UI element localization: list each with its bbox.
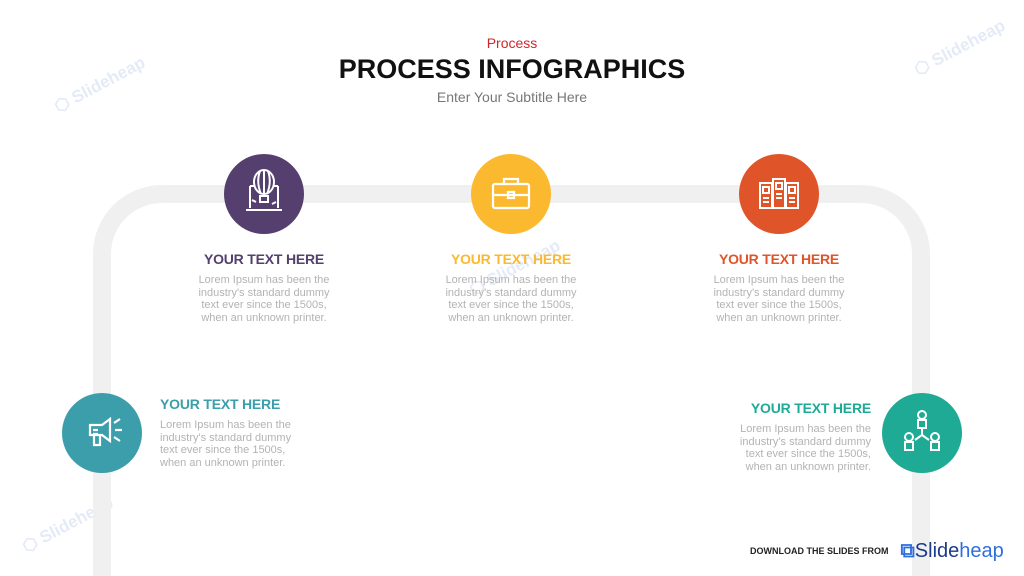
text block 5: when an unknown printer.	[746, 461, 871, 473]
footer logo: heap	[959, 540, 1004, 562]
text block 2: industry's standard dummy	[445, 287, 577, 299]
text block 3: when an unknown printer.	[716, 312, 842, 324]
text block 4: when an unknown printer.	[160, 457, 285, 469]
icon: purple balloon	[224, 154, 304, 234]
watermarks: ⬡ Slideheap	[19, 493, 116, 556]
footer logo: Slide	[915, 540, 959, 562]
text block 1: YOUR TEXT HERE	[204, 251, 324, 267]
text block 1: industry's standard dummy	[198, 287, 330, 299]
watermarks: ⬡ Slideheap	[911, 16, 1008, 79]
text block 2: Lorem Ipsum has been the	[446, 274, 576, 286]
watermarks: ⬡ Slideheap	[51, 53, 148, 116]
title block: Process	[487, 35, 537, 51]
footer logo	[750, 540, 1004, 562]
text block 5: Lorem Ipsum has been the	[740, 423, 871, 435]
text block 5: text ever since the 1500s,	[746, 448, 871, 460]
title block	[339, 35, 685, 105]
text block 4: industry's standard dummy	[160, 432, 291, 444]
text block 1: text ever since the 1500s,	[201, 299, 327, 311]
text block 1: when an unknown printer.	[201, 312, 327, 324]
title block: Enter Your Subtitle Here	[437, 89, 587, 105]
watermarks: ⬡ Slideheap	[466, 236, 563, 299]
text block 5	[740, 400, 871, 473]
text block 3: text ever since the 1500s,	[716, 299, 842, 311]
footer logo: DOWNLOAD THE SLIDES FROM	[750, 546, 888, 556]
text block 3	[713, 251, 845, 324]
text block 1: Lorem Ipsum has been the	[199, 274, 329, 286]
icon: orange buildings	[739, 154, 819, 234]
text block 1	[198, 251, 330, 324]
icon: green network	[882, 393, 962, 473]
text block 3: industry's standard dummy	[713, 287, 845, 299]
text block 4: YOUR TEXT HERE	[160, 396, 280, 412]
text block 3: YOUR TEXT HERE	[719, 251, 839, 267]
icon: teal megaphone	[62, 393, 142, 473]
text block 5: YOUR TEXT HERE	[751, 400, 871, 416]
text block 4: Lorem Ipsum has been the	[160, 419, 291, 431]
text block 2: when an unknown printer.	[448, 312, 574, 324]
footer logo: ⧉	[900, 540, 915, 562]
title block: PROCESS INFOGRAPHICS	[339, 54, 685, 84]
text block 4	[160, 396, 291, 469]
text block 2	[445, 251, 577, 324]
text block 4: text ever since the 1500s,	[160, 444, 285, 456]
text block 2: text ever since the 1500s,	[448, 299, 574, 311]
icon: yellow briefcase	[471, 154, 551, 234]
text block 5: industry's standard dummy	[740, 436, 871, 448]
text block 3: Lorem Ipsum has been the	[714, 274, 844, 286]
text block 2: YOUR TEXT HERE	[451, 251, 571, 267]
